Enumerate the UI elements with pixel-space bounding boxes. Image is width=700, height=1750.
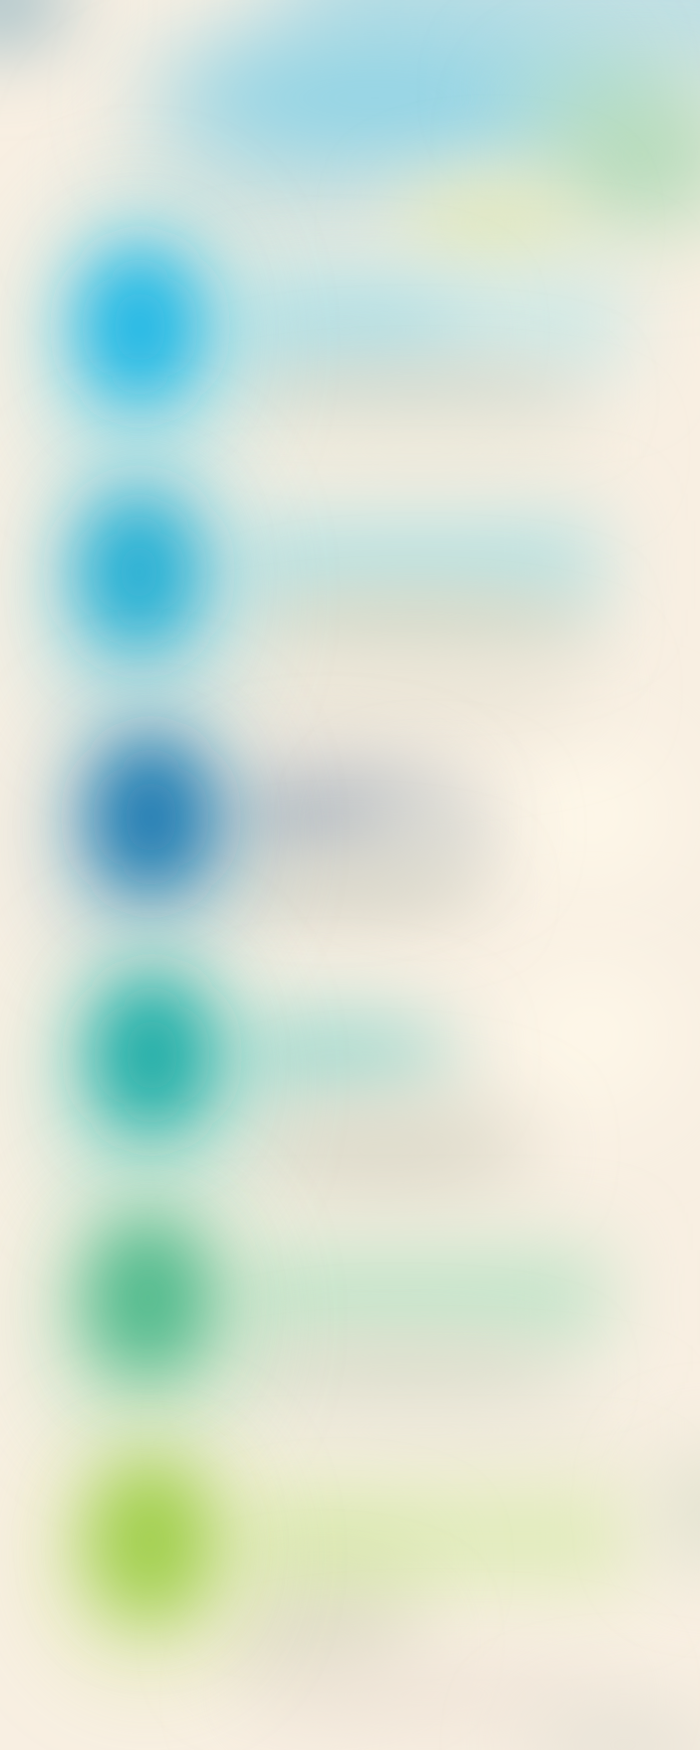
- row 4 text block: [205, 1010, 535, 1198]
- row 2 lower wash: [200, 650, 600, 730]
- row 4 circle icon: [55, 945, 245, 1215]
- row 2 text block: [200, 520, 600, 730]
- row 2 circle halo: [45, 455, 235, 735]
- row 6 subtitle band: [220, 1602, 420, 1678]
- header yellow shape: [400, 187, 580, 263]
- row 6 circle core: [90, 1462, 210, 1618]
- row 1 circle core: [80, 249, 200, 405]
- header corner shade: [0, 0, 70, 50]
- row 3 title band: [210, 765, 450, 875]
- row 5 circle halo: [53, 1195, 243, 1445]
- row 5 title band: [230, 1250, 605, 1345]
- row 2: [45, 455, 600, 735]
- row 1 circle halo: [45, 205, 235, 485]
- row 3 circle core: [91, 739, 211, 895]
- row 6 circle icon: [53, 1440, 243, 1670]
- row 6 text block: [220, 1490, 630, 1727]
- row 4 subtitle band: [235, 1102, 535, 1198]
- footer corner shade: [525, 1705, 700, 1750]
- row 1: [45, 205, 625, 485]
- row 2 circle icon: [45, 455, 235, 735]
- row 6: [53, 1440, 630, 1727]
- row 5 subtitle band: [230, 1343, 570, 1407]
- row 4 circle halo: [55, 945, 245, 1215]
- row 3: [55, 710, 500, 960]
- header pale sky band: [290, 0, 700, 80]
- row 1 lower wash: [230, 420, 610, 480]
- right edge shade: [660, 1450, 700, 1570]
- cream highlight near row 4: [510, 965, 670, 1105]
- row 4 circle core: [92, 977, 212, 1133]
- row 5 circle core: [88, 1220, 208, 1376]
- row 1 subtitle band: [230, 365, 590, 425]
- row 6 lower wash: [240, 1663, 620, 1727]
- row 3 subtitle band: [210, 860, 490, 920]
- header main blue shape: [155, 26, 595, 170]
- row 3 text block: [210, 765, 500, 920]
- row 5 circle icon: [53, 1195, 243, 1445]
- header grey wash: [120, 110, 420, 270]
- header right blue shape: [500, 60, 680, 120]
- row 2 subtitle band: [245, 593, 595, 657]
- row 1 title band pale: [225, 275, 625, 370]
- row 3 title tail: [360, 790, 500, 870]
- row 6 title band: [230, 1490, 630, 1585]
- row 3 circle icon: [55, 710, 245, 960]
- row 4 title band: [205, 1010, 455, 1106]
- row 3 circle halo: [55, 710, 245, 960]
- header green shape: [540, 85, 700, 225]
- header illustration: [0, 0, 700, 270]
- row 2 circle core: [79, 494, 199, 650]
- row 5 text block: [220, 1250, 640, 1460]
- row 1 circle icon: [45, 205, 235, 485]
- row 6 title band strong: [250, 1530, 430, 1600]
- row 1 text block: [225, 275, 625, 480]
- cream highlight near row 3: [510, 745, 670, 885]
- row 4: [55, 945, 535, 1215]
- row 5: [53, 1195, 640, 1460]
- row 5 lower wash: [220, 1400, 640, 1460]
- row 6 circle halo: [53, 1440, 243, 1670]
- row 1 title band strong: [225, 288, 465, 372]
- row 2 title band: [230, 520, 600, 610]
